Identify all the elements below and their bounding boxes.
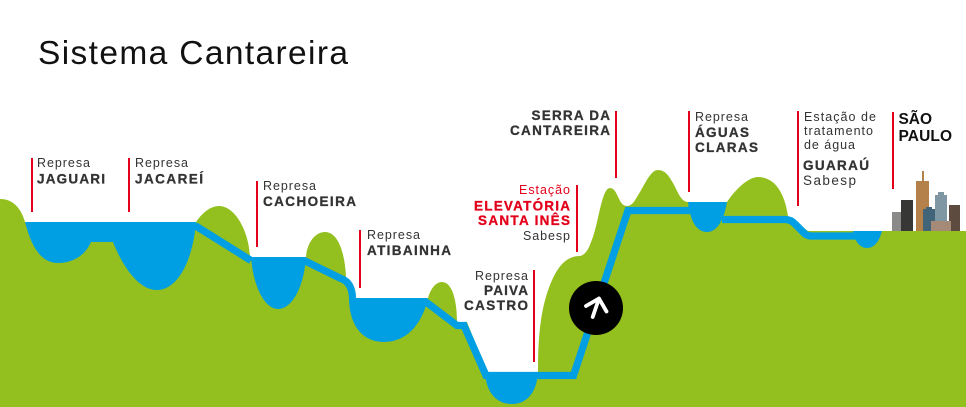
- terrain: green mountains and ground: [0, 170, 966, 407]
- label: Represa Jacareí: Represa: [135, 156, 188, 170]
- label: Estação Elevatória Santa Inês: SANTA INÊS: [478, 213, 570, 228]
- icon: São Paulo skyline: [892, 171, 960, 231]
- label: Represa Cachoeira: [256, 179, 356, 247]
- label: Estação Elevatória Santa Inês: Sabesp: [523, 229, 570, 243]
- reservoir: Paiva Castro: [485, 372, 538, 404]
- reservoir: Águas Claras: [688, 202, 727, 232]
- label: Represa Jacareí: JACAREÍ: [135, 172, 204, 186]
- label: Estação de tratamento de água Guaraú: tratamento: [804, 124, 873, 138]
- label: Estação de tratamento de água Guaraú: Sabesp: [803, 173, 856, 188]
- label: São Paulo: PAULO: [898, 128, 952, 145]
- label: Represa Águas Claras: [688, 110, 758, 192]
- label: Estação Elevatória Santa Inês: ELEVATÓRIA: [474, 198, 570, 214]
- reservoir: Cachoeira: [251, 257, 306, 309]
- label: Represa Cachoeira: Represa: [263, 179, 316, 193]
- water pipeline: [195, 210, 856, 376]
- label: Represa Jacareí: [128, 156, 204, 212]
- label: Represa Águas Claras: Represa: [695, 110, 748, 124]
- label: São Paulo: [892, 110, 952, 189]
- label: Estação Elevatória Santa Inês: [474, 183, 578, 252]
- label: Represa Paiva Castro: CASTRO: [464, 298, 528, 313]
- label: Estação de tratamento de água Guaraú: [797, 110, 876, 206]
- icon: pump arrow in black circle: [569, 281, 623, 335]
- reservoir: Guaraú: [853, 231, 882, 248]
- title: Sistema Cantareira: [38, 35, 348, 72]
- label: Estação de tratamento de água Guaraú: de água: [804, 138, 855, 152]
- label: Serra da Cantareira: SERRA DA: [532, 108, 610, 123]
- label: São Paulo: SÃO: [898, 110, 932, 128]
- label: Serra da Cantareira: CANTAREIRA: [510, 123, 610, 138]
- label: Estação de tratamento de água Guaraú: Estação de: [804, 110, 876, 124]
- label: Represa Paiva Castro: PAIVA: [484, 283, 528, 298]
- label: Represa Jaguari: [31, 156, 105, 212]
- label: Represa Águas Claras: CLARAS: [695, 140, 758, 155]
- label: Represa Atibainha: ATIBAINHA: [367, 243, 451, 258]
- label: Represa Atibainha: [359, 228, 451, 288]
- label: Estação Elevatória Santa Inês: Estação: [519, 183, 570, 197]
- label: Represa Jaguari: JAGUARI: [37, 172, 105, 186]
- label: Represa Cachoeira: CACHOEIRA: [263, 194, 356, 209]
- label: Serra da Cantareira: [510, 108, 617, 178]
- reservoir: Atibainha: [349, 298, 428, 342]
- label: Represa Atibainha: Represa: [367, 228, 420, 242]
- label: Represa Águas Claras: ÁGUAS: [695, 125, 749, 140]
- label: Represa Paiva Castro: Represa: [475, 269, 528, 283]
- reservoir: Jaguari and Jacareí: [25, 222, 196, 290]
- label: Represa Paiva Castro: [464, 269, 535, 362]
- label: Estação de tratamento de água Guaraú: GUARAÚ: [803, 158, 869, 173]
- label: Represa Jaguari: Represa: [37, 156, 90, 170]
